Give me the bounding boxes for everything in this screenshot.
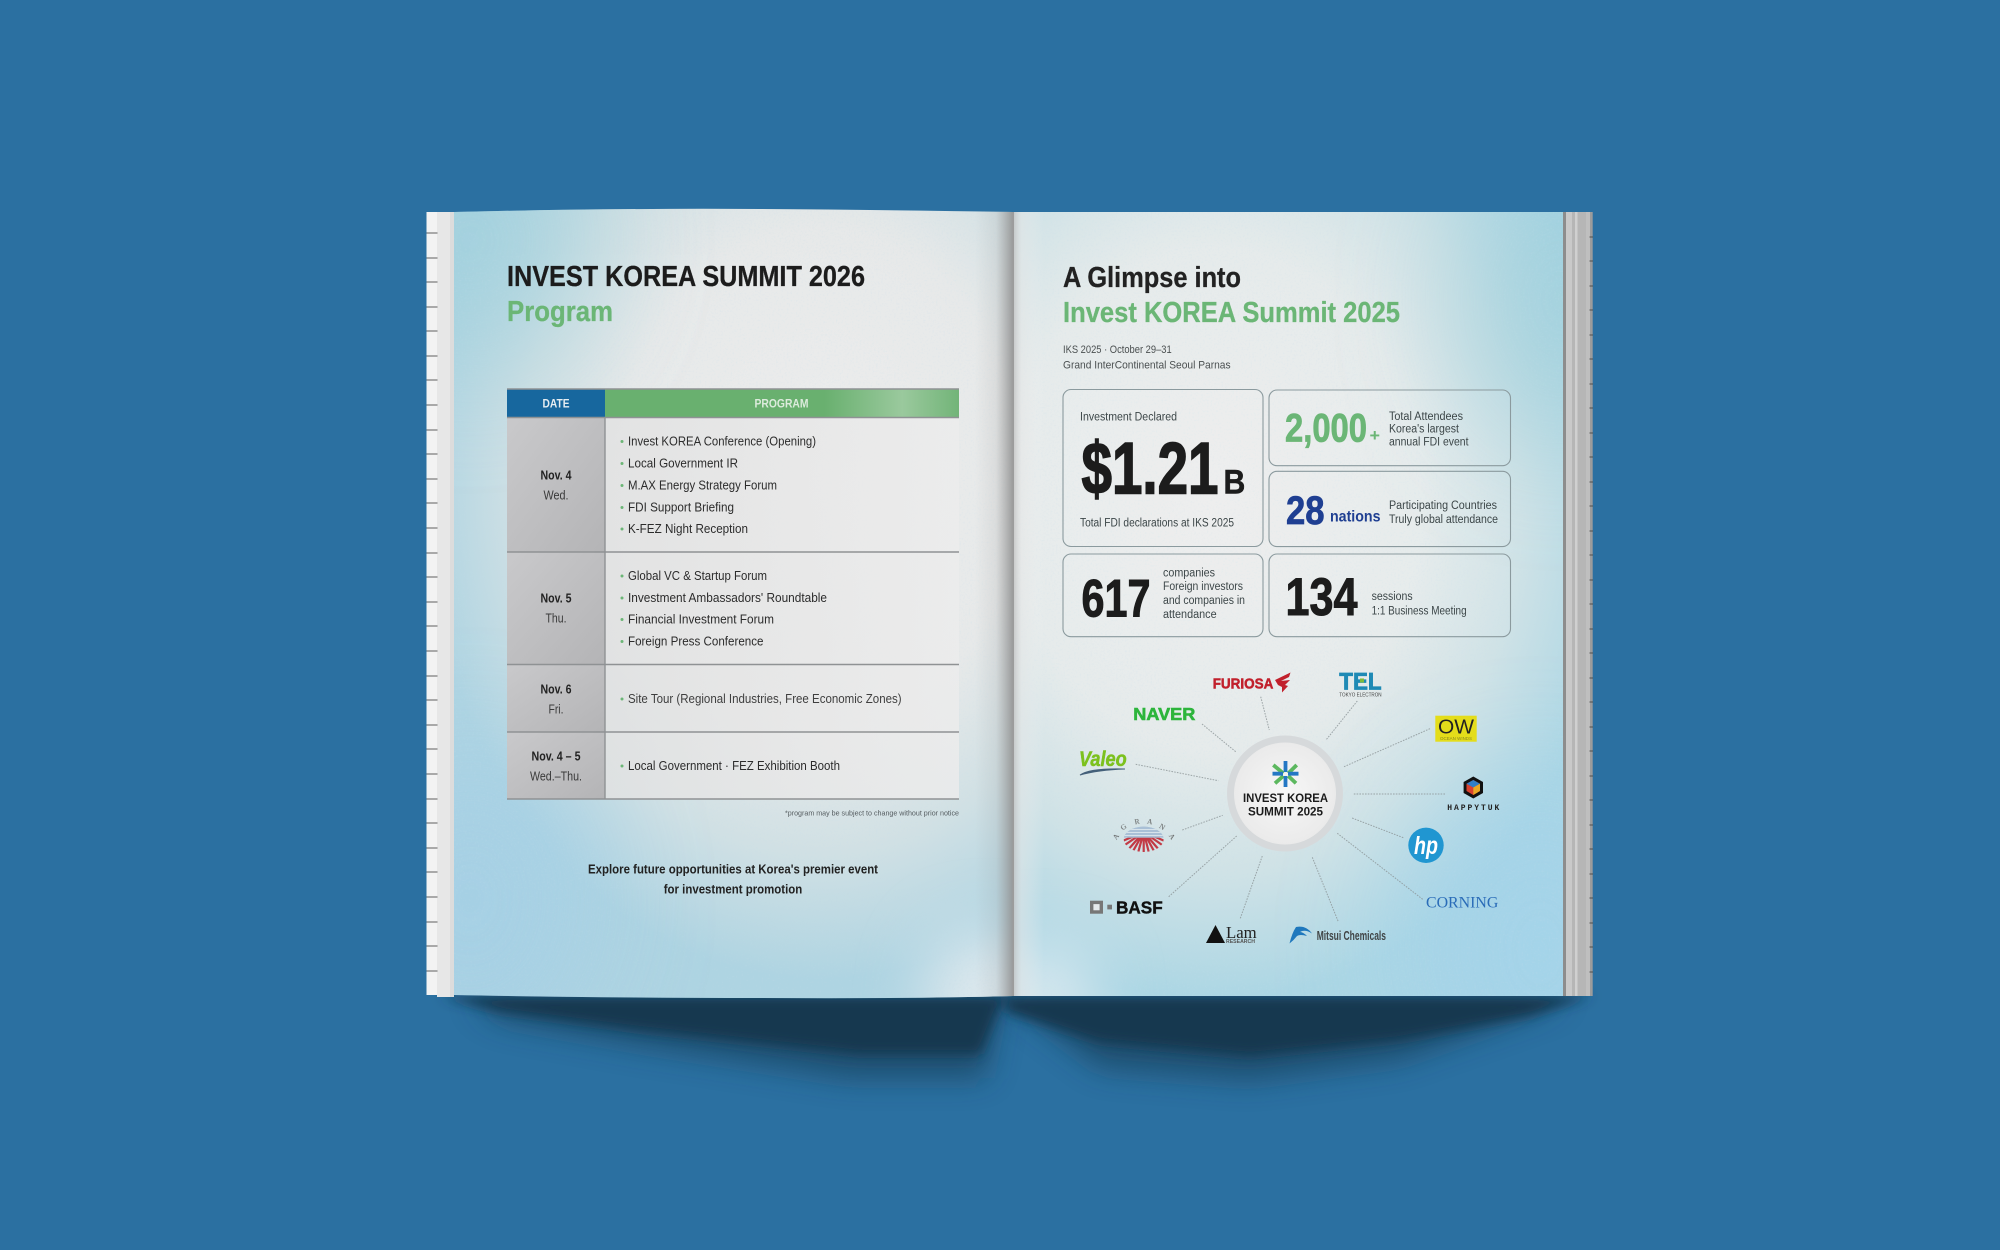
logo: Furiosa: FURIOSA [1213, 676, 1274, 692]
row: Nov 5: Global VC & Startup Forum [628, 569, 767, 583]
logo: Agrana: G [1119, 821, 1129, 832]
logo: Agrana: N [1158, 822, 1167, 832]
logo: Agrana: R [1134, 817, 1140, 826]
heading: right page: A Glimpse into [1063, 262, 1241, 294]
row: Nov 4-5 [530, 750, 840, 784]
row: Nov 4-5: Wed.–Thu. [530, 770, 582, 784]
event details: IKS 2025 · October 29–31 [1063, 344, 1172, 356]
row: Nov 6: Nov. 6 [540, 682, 572, 696]
heading: right page [1063, 262, 1400, 329]
row: Nov 5: Nov. 5 [540, 592, 572, 606]
logo: Lam Research: Lam [1226, 923, 1257, 942]
card: total attendees [1269, 390, 1510, 466]
heading: left page: INVEST KOREA SUMMIT 2026 [507, 261, 865, 293]
logo: Agrana: A [1111, 831, 1122, 841]
row: Nov 4-5: Local Government · FEZ Exhibition Booth [628, 759, 840, 773]
logo: HP: hp [1414, 832, 1438, 860]
logo: Mitsui Chemicals: Mitsui Chemicals [1317, 929, 1386, 943]
logo: Agrana [1114, 818, 1174, 852]
icon: summit logo [1272, 761, 1298, 787]
card: investment declared: Total FDI declarations at IKS 2025 [1080, 518, 1234, 530]
table row backgrounds [507, 389, 959, 799]
card: participating countries: 28 [1286, 489, 1325, 533]
row: Nov 4: M.AX Energy Strategy Forum [628, 479, 777, 493]
closing statement: Explore future opportunities at Korea's premier event [588, 862, 879, 876]
card: investment declared: B [1224, 464, 1245, 502]
row: Nov 5: Foreign Press Conference [628, 635, 764, 649]
row: Nov 4 [540, 435, 816, 536]
closing statement: for investment promotion [664, 882, 802, 896]
row: Nov 4: Nov. 4 [540, 468, 572, 482]
event details [1063, 344, 1231, 372]
logo: Agrana: A [1146, 817, 1154, 827]
heading: left page [507, 261, 865, 328]
card: participating countries [1269, 471, 1510, 547]
logo: Tokyo Electron: TEL [1339, 668, 1382, 695]
card: sessions [1269, 554, 1510, 637]
row: Nov 4: FDI Support Briefing [628, 501, 734, 515]
row: Nov 5: Investment Ambassadors' Roundtable [628, 591, 827, 605]
card: sessions: sessions [1372, 591, 1413, 603]
row: Nov 6: Fri. [548, 702, 564, 716]
book shadow [440, 996, 1592, 1080]
logo: Naver: NAVER [1133, 704, 1196, 724]
row: Nov 5: Thu. [546, 612, 566, 626]
row: Nov 4-5: Nov. 4 – 5 [532, 750, 581, 764]
card: sessions: 134 [1286, 568, 1358, 627]
logo: Lam Research [1206, 923, 1257, 945]
card: companies: attendance [1163, 609, 1217, 621]
card: companies: Foreign investors [1163, 581, 1243, 593]
row: Nov 4: Wed. [544, 488, 568, 502]
row: Nov 4: Local Government IR [628, 457, 738, 471]
card: companies: 617 [1082, 570, 1150, 629]
table header: PROGRAM [754, 396, 808, 410]
card: investment declared [1063, 390, 1263, 546]
logo: Ocean Winds: OW [1438, 716, 1474, 738]
card: total attendees: annual FDI event [1389, 437, 1469, 449]
logo: Mitsui Chemicals [1290, 927, 1386, 944]
card: sessions: 1:1 Business Meeting [1372, 606, 1467, 618]
logo: BASF [1092, 897, 1163, 917]
heading: right page: Invest KOREA Summit 2025 [1063, 297, 1400, 329]
logo: Happytuk [1447, 776, 1499, 813]
logo: Corning: CORNING [1426, 895, 1499, 912]
footnote: *program may be subject to change without prior notice [785, 808, 959, 818]
right page edge stack [1563, 212, 1593, 996]
panel: left page background [454, 208, 1012, 998]
card: total attendees: Korea's largest [1389, 424, 1460, 436]
row: Nov 4: Invest KOREA Conference (Opening) [628, 435, 816, 449]
card: companies [1063, 554, 1263, 637]
logo: Lam Research: RESEARCH [1226, 939, 1255, 945]
card: total attendees: 2,000 [1285, 407, 1367, 451]
logo: Ocean Winds: OCEAN WINDS [1440, 736, 1472, 741]
table header: DATE [542, 396, 570, 410]
table: program schedule [507, 389, 959, 799]
card: participating countries: Truly global attendance [1389, 514, 1498, 526]
left page edge stack [426, 212, 454, 997]
table header [507, 389, 959, 417]
logo: Happytuk: HAPPYTUK [1447, 804, 1499, 813]
closing statement [588, 862, 879, 896]
logo: HP [1408, 828, 1444, 863]
partner network connector lines [1136, 697, 1445, 922]
row: Nov 4: K-FEZ Night Reception [628, 522, 748, 536]
card: companies: and companies in [1163, 595, 1245, 607]
row: Nov 6: Site Tour (Regional Industries, Free Economic Zones) [628, 692, 902, 706]
logo: Agrana: A [1167, 832, 1178, 842]
central hub: Invest Korea Summit 2025 [1227, 736, 1343, 852]
row: Nov 5: Financial Investment Forum [628, 613, 774, 627]
card: companies: companies [1163, 568, 1215, 580]
central hub: Invest Korea Summit 2025: SUMMIT 2025 [1248, 806, 1324, 818]
card: total attendees: Total Attendees [1389, 411, 1463, 423]
card: total attendees: + [1370, 426, 1380, 445]
panel: right page background [1014, 212, 1563, 996]
logo: Valeo: Valeo [1079, 748, 1127, 771]
central hub: Invest Korea Summit 2025: INVEST KOREA [1243, 793, 1328, 805]
card: participating countries: Participating Countries [1389, 500, 1497, 512]
card: participating countries: nations [1330, 509, 1381, 526]
heading: left page: Program [507, 296, 613, 328]
card: investment declared: $1.21 [1082, 428, 1218, 510]
row: Nov 6 [540, 682, 902, 716]
spine line [1012, 212, 1014, 996]
logo: Furiosa [1213, 672, 1290, 692]
logo: BASF: BASF [1116, 897, 1163, 917]
card: investment declared: Investment Declared [1080, 412, 1177, 424]
event details: Grand InterContinental Seoul Parnas [1063, 360, 1231, 372]
row: Nov 5 [540, 569, 827, 649]
logo: Tokyo Electron: TOKYO ELECTRON [1339, 693, 1382, 699]
